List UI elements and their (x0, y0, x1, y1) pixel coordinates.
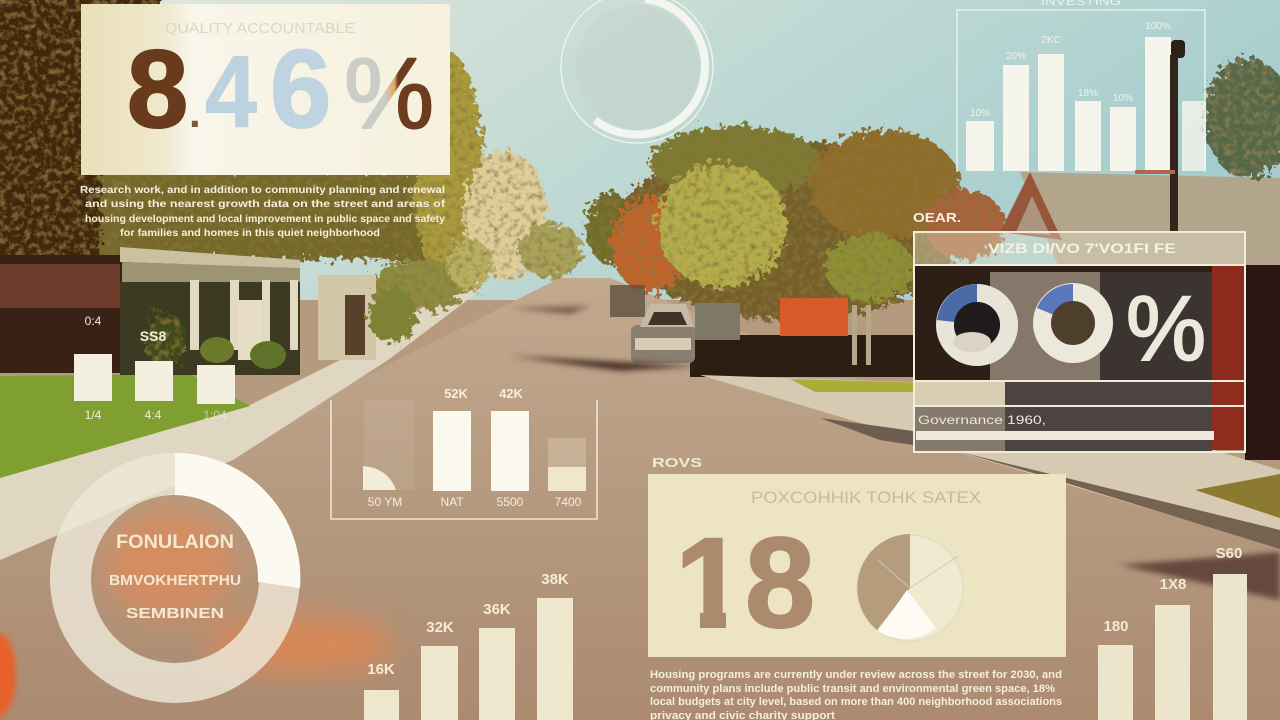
labels: 32K (426, 619, 454, 636)
sky (0, 0, 1280, 300)
big number: 18 (675, 512, 815, 655)
bar chart: bottom right (1098, 545, 1247, 720)
bar labels: 10% (970, 108, 990, 119)
labels (367, 571, 569, 678)
text block: under bottom panel: community plans include public transit and environmental green space, 18% (650, 683, 1055, 695)
text block: under bottom panel (650, 669, 1062, 720)
labels: NAT (440, 495, 464, 509)
labels: 50 YM (368, 495, 402, 509)
bar chart: top right (957, 0, 1206, 172)
labels: S60 (1216, 545, 1242, 562)
panel title: QUALITY ACCOUNTABLE (165, 20, 355, 37)
labels (85, 314, 227, 422)
road (0, 278, 1280, 720)
progress bar (916, 431, 1214, 440)
big number: 8 (127, 28, 188, 151)
bar chart: centre (331, 386, 597, 519)
row label: Governance 1960, (918, 413, 1046, 427)
bar labels: 10% (1113, 93, 1133, 104)
labels: 36K (483, 601, 511, 618)
pie chart (857, 534, 963, 641)
label: bottom panel caption: ROVS (652, 455, 702, 470)
left house (0, 247, 416, 375)
street lamp (1135, 40, 1185, 232)
parked car (610, 285, 740, 363)
donut: bottom left (50, 453, 300, 703)
right hedge and red wall (690, 335, 915, 377)
panel: top-left headline stat (81, 4, 450, 175)
labels: 1/4 (85, 408, 102, 422)
trees behind left text (100, 52, 582, 311)
right house (1000, 172, 1280, 460)
inner plot outline (364, 400, 414, 490)
labels: 7400 (555, 495, 582, 509)
text block: under headline: Research work, and in addition to community planning and renewal (80, 185, 445, 196)
panel outline and rows (914, 232, 1245, 452)
header strip (915, 233, 1245, 265)
road shadows (510, 306, 1280, 600)
text block: under headline: and using the nearest growth data on the street and areas of (85, 199, 446, 210)
text block: under headline: housing development and local improvement in public space and safety (85, 214, 445, 225)
donut text: FONULAION (116, 532, 234, 553)
panel title: POXCOHHIK TOHK SATEX (751, 488, 981, 507)
bars (364, 598, 573, 720)
donut right (1037, 284, 1104, 354)
big number: 6 (270, 28, 331, 151)
bar labels (970, 21, 1171, 119)
labels (1103, 545, 1242, 635)
labels: 52K (444, 386, 469, 401)
donut text: SEMBINEN (126, 605, 224, 622)
photo inside panel (915, 265, 1245, 380)
labels: 1X8 (1160, 576, 1186, 593)
panel: bottom stat (648, 474, 1066, 657)
label: panel caption: OEAR. (913, 210, 961, 225)
labels: 4:4 (145, 408, 162, 422)
big number (127, 28, 434, 151)
frame (331, 400, 597, 519)
bars (74, 354, 235, 404)
text block: under headline (80, 185, 446, 239)
text block: under bottom panel: local budgets at city level, based on more than 400 neighborhood associations (650, 696, 1062, 708)
green strip (790, 379, 1005, 392)
left dark trees (0, 0, 160, 260)
red flare (0, 633, 16, 717)
bar labels: 100% (1145, 21, 1171, 32)
labels: 16K (367, 661, 395, 678)
donut left (937, 284, 1009, 357)
ring: top centre (561, 0, 713, 143)
left sidewalk (0, 287, 478, 560)
bar chart: bottom centre (364, 571, 573, 720)
labels: 42K (499, 386, 524, 401)
bars (363, 411, 586, 491)
labels: 38K (541, 571, 569, 588)
text block: under bottom panel: Housing programs are currently under review across the street for 2030, and (650, 669, 1062, 681)
big number: . (189, 89, 201, 136)
bar labels: 18% (1078, 88, 1098, 99)
bar chart: small left (74, 314, 235, 422)
labels (368, 386, 582, 509)
ring (50, 453, 300, 703)
kerb lawn patch (1195, 474, 1280, 518)
labels: SS8 (140, 328, 166, 344)
highlighted segment (175, 453, 300, 588)
labels: 1:04 (203, 408, 227, 422)
right sidewalk (700, 375, 1280, 548)
centre tree cluster (586, 126, 1005, 320)
bars (966, 37, 1206, 171)
right tree (1204, 58, 1280, 178)
header label: VIZB DI/VO 7'VO1FI FE (988, 240, 1176, 256)
chart frame (957, 10, 1205, 172)
big number: % (344, 38, 434, 150)
labels: 0:4 (85, 314, 102, 328)
text block: under headline: for families and homes in this quiet neighborhood (120, 228, 380, 239)
panel background (648, 474, 1066, 657)
percent sign: % (1126, 278, 1206, 380)
bar labels: 20% (1006, 51, 1026, 62)
lawn (0, 374, 250, 478)
donut text: BMVOKHERTPHU (109, 572, 241, 589)
labels: 180 (1103, 618, 1129, 635)
panel background (81, 4, 450, 175)
bars (1098, 574, 1247, 720)
donut text (109, 532, 241, 622)
labels: 5500 (497, 495, 524, 509)
bar labels: 2KC (1041, 35, 1061, 46)
orange road glow (105, 510, 395, 675)
panel: right donut stat (914, 232, 1245, 452)
big number: 4 (205, 35, 257, 149)
